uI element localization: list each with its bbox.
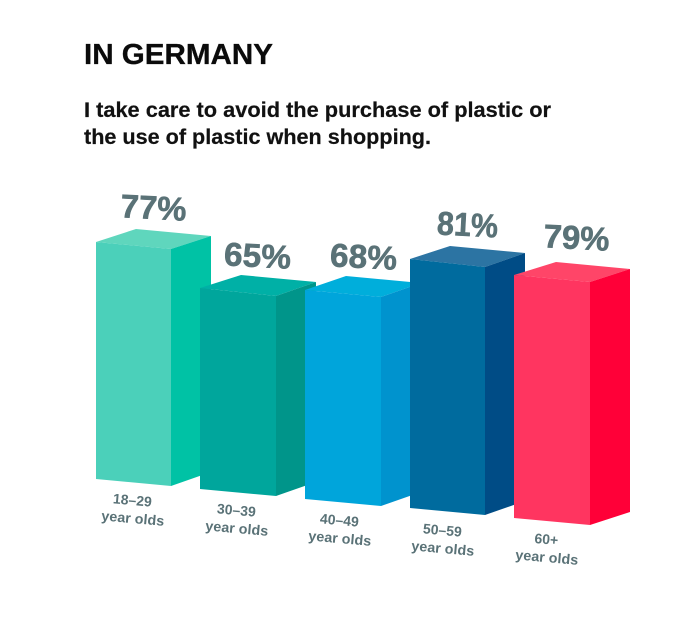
bar: 50–59 [410,246,525,515]
value 77%: 77% [120,187,188,228]
value 68%: 68% [329,236,398,277]
subtitle [84,99,551,149]
age labels [101,489,581,568]
bar: 30–39 [200,275,316,496]
label 18–29 [101,489,167,529]
label 40–49: 40–49 [319,510,360,530]
value 65%: 65% [223,235,292,276]
label 30–39: 30–39 [216,500,257,520]
label 30–39 [205,499,271,539]
subtitle: the use of plastic when shopping. [84,126,431,149]
bar: 18–29 [96,229,211,486]
label 50–59: year olds [411,537,475,559]
label 60+: year olds [515,546,579,568]
subtitle: I take care to avoid the purchase of plastic or [84,99,551,122]
percentage values [120,187,611,277]
label 50–59: 50–59 [422,520,463,540]
label 60+ [515,528,581,568]
bar: 60+ [514,262,630,525]
label 40–49 [308,509,374,549]
label 50–59 [411,519,477,559]
bar: 40–49 [305,276,421,506]
label 30–39: year olds [205,517,269,539]
label 18–29: year olds [101,507,165,529]
value 81%: 81% [436,204,499,245]
bar chart [96,229,630,525]
value 79%: 79% [543,217,611,258]
label 60+: 60+ [534,530,559,548]
label 40–49: year olds [308,527,372,549]
label 18–29: 18–29 [112,490,153,510]
title: IN GERMANY [84,39,273,71]
